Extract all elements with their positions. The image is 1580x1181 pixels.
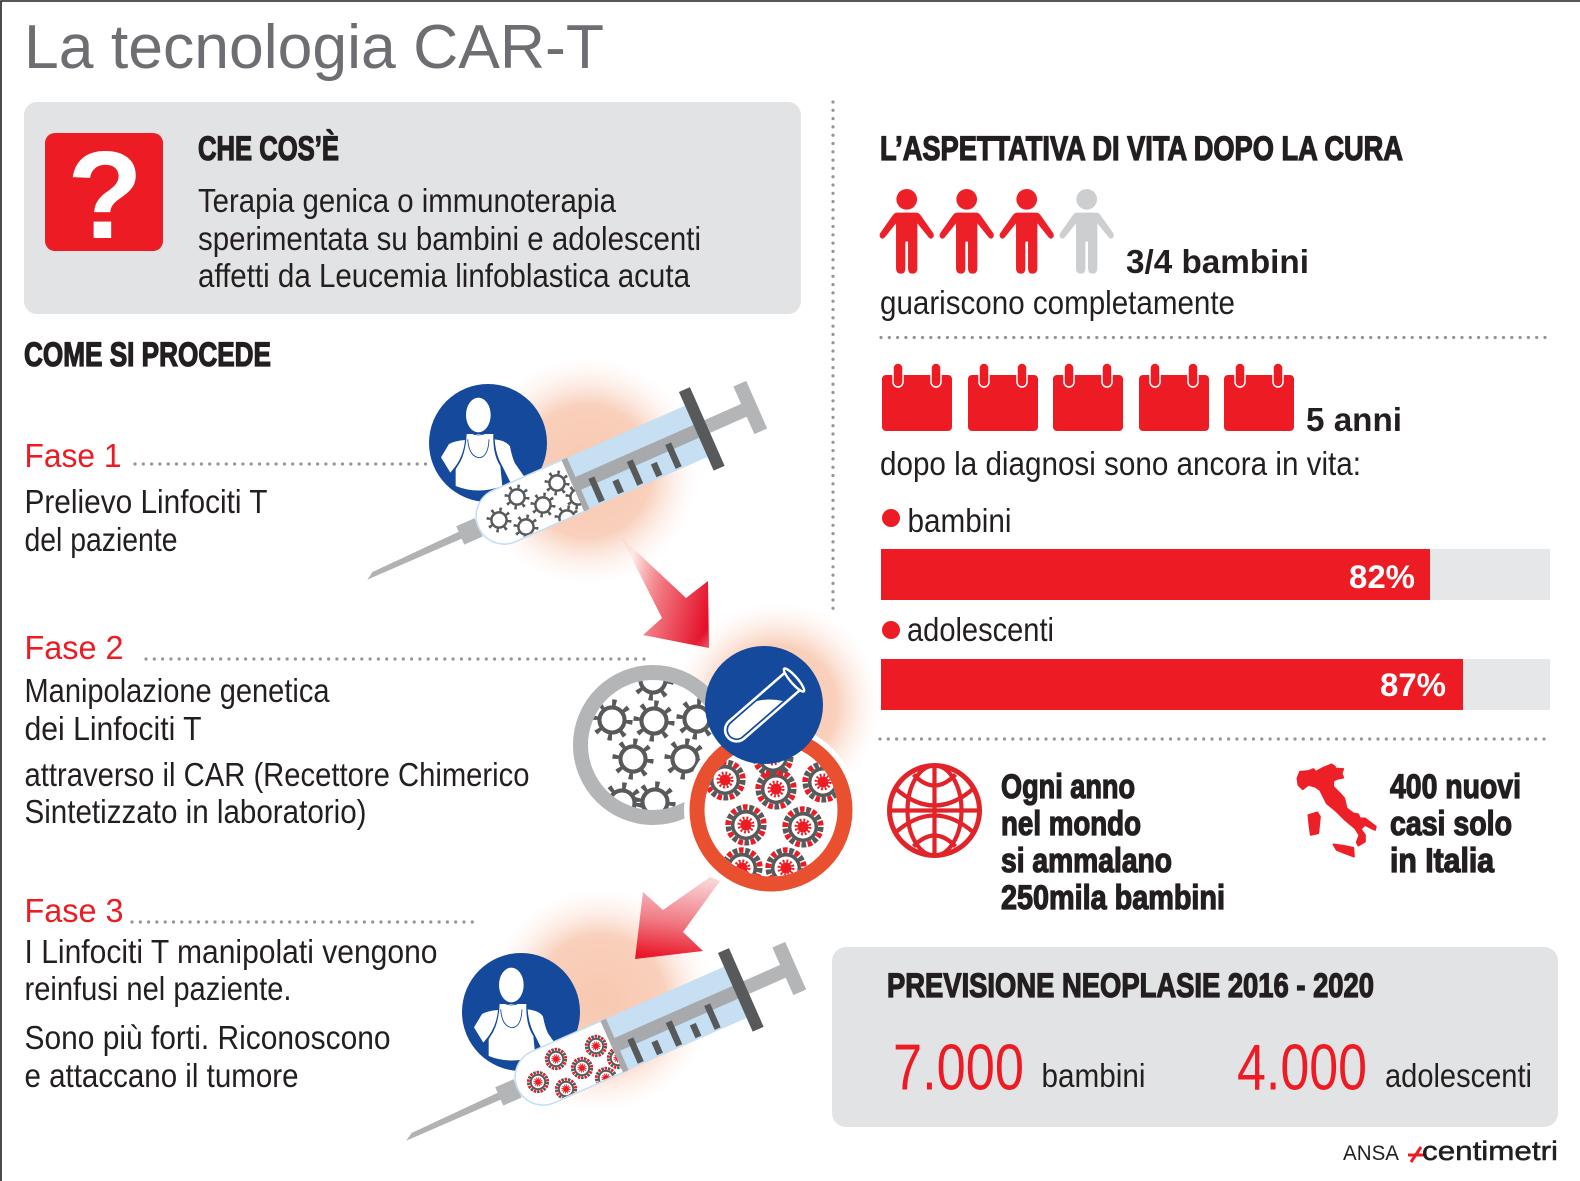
text: definizione: Terapia genica o immunoterapia — [198, 182, 617, 219]
text: definizione: sperimentata su bambini e adolescenti — [198, 220, 701, 257]
text: ogni anno: si ammalano — [1001, 842, 1172, 880]
bar chart: adolescenti — [881, 611, 1550, 710]
bar chart: adolescenti: 87% — [1380, 667, 1446, 703]
stat: 3/4 bambini: 3/4 bambini — [1126, 243, 1309, 280]
arrow: fase 2 to fase 3 — [635, 877, 720, 959]
pictogram: calendars — [882, 363, 1294, 431]
heading: come si procede: COME SI PROCEDE — [24, 336, 271, 374]
text: definizione: affetti da Leucemia linfoblastica acuta — [198, 257, 691, 294]
bar chart: bambini — [881, 502, 1550, 600]
stat: 7.000 bambini — [893, 1030, 1146, 1104]
heading: aspettativa: L’ASPETTATIVA DI VITA DOPO LA CURA — [880, 130, 1403, 168]
icon: italy map — [1297, 764, 1376, 857]
panel: che cos'è — [24, 102, 801, 314]
icon: test tube — [705, 646, 823, 764]
heading: previsione: PREVISIONE NEOPLASIE 2016 - 2020 — [887, 967, 1374, 1005]
fase 2 text: dei Linfociti T — [24, 710, 202, 747]
icon: globe — [890, 766, 980, 856]
illustration: fase 1 syringe — [367, 368, 768, 580]
stat: 7.000 bambini: 7.000 — [893, 1030, 1024, 1104]
fase 2 text: Manipolazione genetica — [24, 672, 330, 709]
text: dopo la diagnosi: dopo la diagnosi sono ancora in vita: — [880, 445, 1361, 482]
fase 3 text: Fase 3 — [24, 892, 124, 929]
fase 3 text: I Linfociti T manipolati vengono — [24, 933, 438, 970]
text: ogni anno — [1001, 768, 1225, 917]
illustration: fase 2 cells — [580, 602, 880, 897]
text: 400 nuovi casi — [1390, 768, 1521, 880]
panel: previsione neoplasie — [832, 947, 1558, 1127]
credit: ansa centimetri: centimetri — [1422, 1136, 1558, 1166]
text: ogni anno: 250mila bambini — [1001, 879, 1225, 917]
text: definizione — [198, 182, 701, 294]
fase 2 text: Fase 2 — [24, 629, 124, 666]
text: ogni anno: nel mondo — [1001, 805, 1141, 843]
text: 400 nuovi casi: 400 nuovi — [1390, 768, 1521, 806]
credit: ansa centimetri — [1343, 1136, 1558, 1166]
bar chart: bambini: bambini — [908, 502, 1012, 539]
text: ogni anno: Ogni anno — [1001, 768, 1135, 806]
icon: question mark: ? — [67, 127, 143, 265]
stat: 4.000 adolescenti: 4.000 — [1237, 1030, 1367, 1104]
bar chart: adolescenti: adolescenti — [907, 611, 1054, 648]
pictogram: children — [880, 189, 1114, 274]
text: 400 nuovi casi: casi solo — [1390, 805, 1512, 843]
title: La tecnologia CAR-T — [24, 13, 604, 82]
arrow: fase 1 to fase 2 — [621, 537, 709, 648]
fase 1 text: Prelievo Linfociti T — [24, 483, 268, 520]
text: 400 nuovi casi: in Italia — [1390, 842, 1495, 880]
grey ring of T cells — [580, 663, 726, 820]
fase 3 text — [24, 892, 474, 1094]
fase 1 text — [24, 437, 430, 558]
illustration: fase 3 syringe — [406, 900, 806, 1141]
fase 3 text: reinfusi nel paziente. — [24, 970, 292, 1007]
fase 3 text: e attaccano il tumore — [24, 1057, 298, 1094]
credit: ansa centimetri: ANSA — [1343, 1142, 1399, 1165]
fase 2 text: attraverso il CAR (Recettore Chimerico — [24, 756, 530, 793]
text: guariscono: guariscono completamente — [880, 284, 1235, 321]
orange ring of CAR-T cells — [684, 735, 852, 892]
fase 1 text: Fase 1 — [24, 437, 122, 474]
bar chart: bambini: 82% — [1349, 559, 1415, 595]
stat: 4.000 adolescenti — [1237, 1030, 1532, 1104]
fase 2 text: Sintetizzato in laboratorio) — [24, 793, 366, 830]
divider: vertical dots — [831, 102, 835, 611]
fase 2 text — [24, 629, 647, 830]
stat: 7.000 bambini: bambini — [1042, 1057, 1146, 1094]
fase 1 text: del paziente — [24, 521, 178, 558]
stat: 5 anni: 5 anni — [1306, 401, 1402, 438]
fase 3 text: Sono più forti. Riconoscono — [24, 1019, 390, 1056]
icon: question mark — [45, 127, 163, 265]
heading: che cos'è: CHE COS’È — [198, 130, 339, 168]
stat: 4.000 adolescenti: adolescenti — [1385, 1057, 1532, 1094]
